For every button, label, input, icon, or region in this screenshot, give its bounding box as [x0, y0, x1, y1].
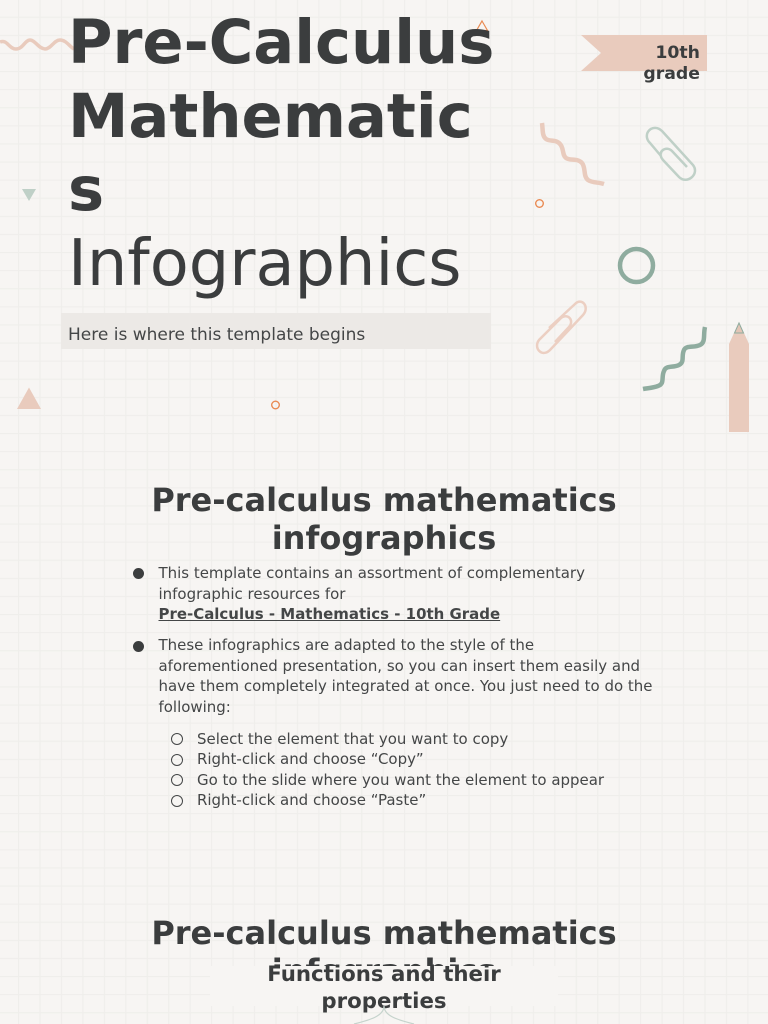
- text: second paragraph: aforementioned presentation, so you can insert them easily and: [158, 656, 640, 674]
- heading: functions and their properties: Functions and their: [267, 962, 501, 986]
- text: second paragraph: have them completely integrated at once. You just need to do the: [158, 677, 652, 695]
- heading: section two: infographics: [272, 952, 496, 990]
- icon: pink squiggle: [542, 123, 604, 184]
- icon: sage paperclip: [647, 128, 695, 180]
- title: Mathematic: [68, 82, 473, 152]
- bullet dot one: [133, 568, 144, 579]
- sub-list: [171, 730, 604, 809]
- heading: section one: Pre-calculus mathematics: [151, 481, 617, 519]
- banner label: [643, 43, 700, 84]
- banner label: grade: [643, 64, 700, 84]
- icon: pink triangle: [17, 388, 41, 409]
- cover panel: [210, 966, 558, 1006]
- banner label: 10th: [655, 43, 700, 63]
- subtitle band: [61, 313, 491, 349]
- heading: section one: infographics: [272, 519, 496, 557]
- heading: section one: [151, 481, 617, 557]
- sub-item three: Go to the slide where you want the element to appear: [197, 770, 604, 788]
- title: [68, 8, 494, 300]
- icon: pink wavy line left: [0, 40, 74, 49]
- sub-item four: Right-click and choose “Paste”: [197, 791, 426, 809]
- text: first paragraph: [158, 564, 585, 623]
- icon: small orange circle right: [536, 200, 543, 207]
- icon: sage squiggle: [643, 327, 705, 389]
- sub-item two: Right-click and choose “Copy”: [197, 750, 424, 768]
- icon: small orange triangle top: [476, 21, 488, 30]
- bullet list: [133, 564, 652, 809]
- decorations: [0, 20, 749, 432]
- bullet dot two: [133, 641, 144, 652]
- icon: pencil: [729, 322, 749, 432]
- ribbon banner: [581, 35, 707, 71]
- heading: section two: [151, 914, 617, 990]
- title: s: [68, 155, 104, 225]
- icon: sage triangle: [22, 189, 36, 201]
- icon: pink paperclip: [537, 302, 586, 353]
- icon: small orange circle centre: [272, 401, 279, 409]
- heading: section two: Pre-calculus mathematics: [151, 914, 617, 952]
- title: Pre-Calculus: [68, 8, 494, 78]
- heading: functions and their properties: [267, 962, 501, 1014]
- text: second paragraph: These infographics are adapted to the style of the: [158, 636, 534, 654]
- text: first paragraph: infographic resources for: [158, 584, 345, 602]
- icon: sage ring: [620, 249, 653, 282]
- text: first paragraph: This template contains an assortment of complementary: [158, 564, 585, 582]
- text: first paragraph: Pre-Calculus - Mathematics - 10th Grade: [158, 605, 500, 623]
- text: second paragraph: [158, 636, 652, 716]
- title: Infographics: [68, 226, 462, 300]
- sub-item one: Select the element that you want to copy: [197, 730, 508, 748]
- text: second paragraph: following:: [158, 698, 231, 716]
- subtitle band: Here is where this template begins: [68, 325, 365, 345]
- heading: functions and their properties: properties: [321, 988, 447, 1014]
